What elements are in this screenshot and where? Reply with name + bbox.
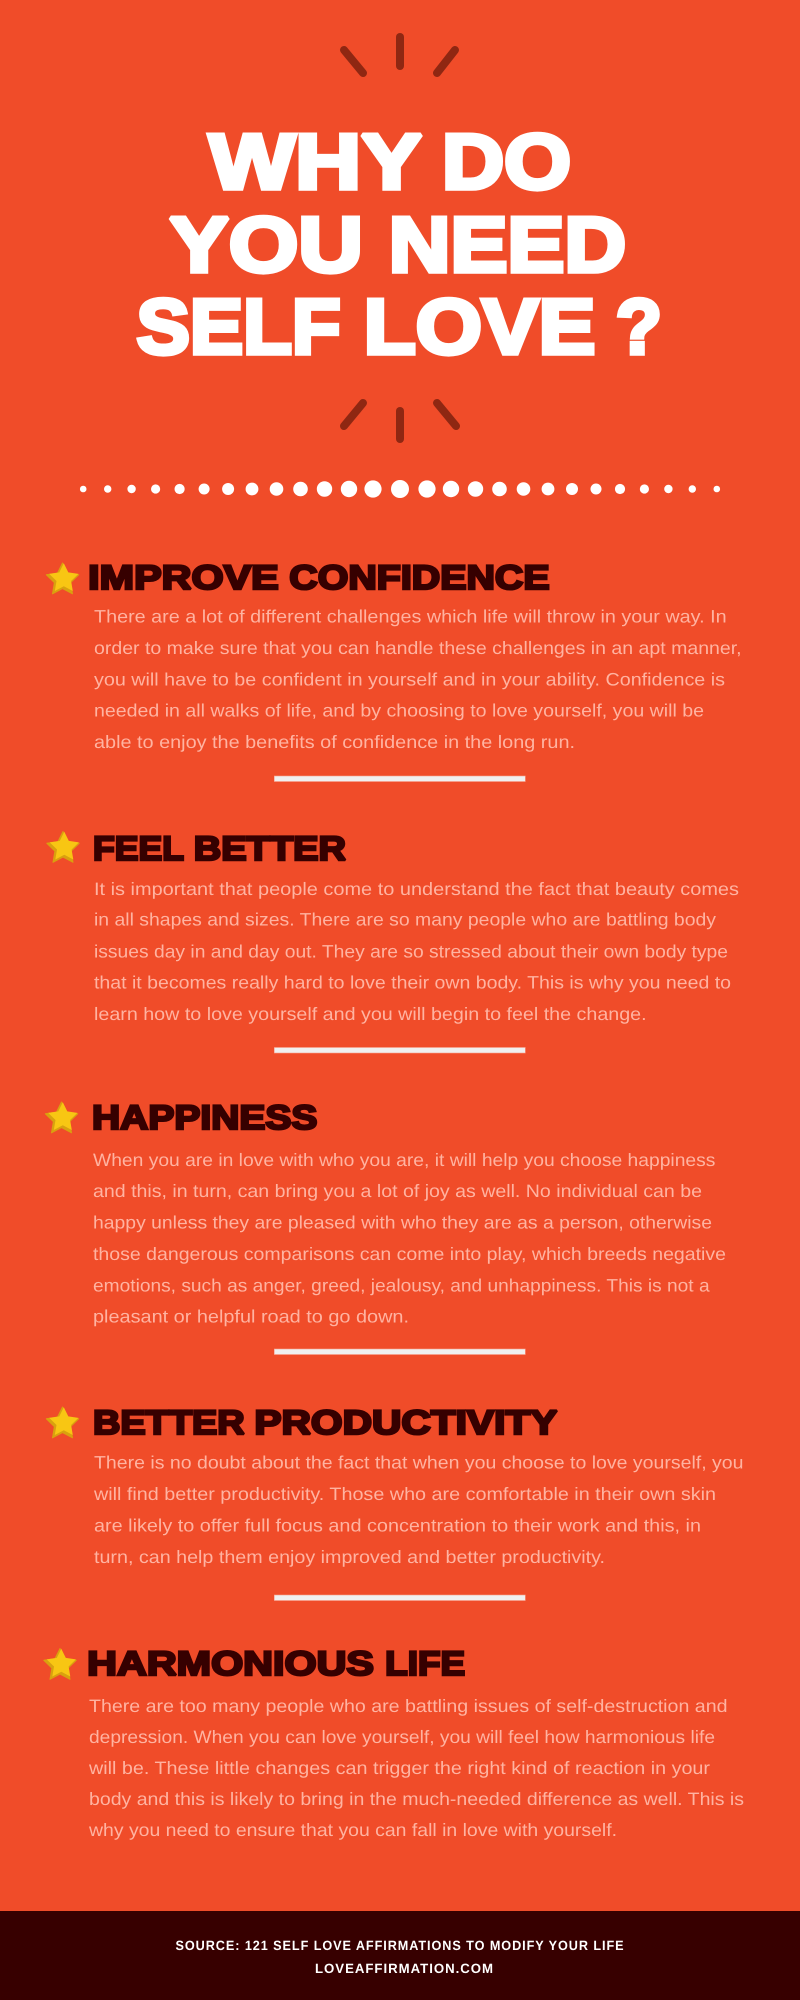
dotted separator	[80, 480, 720, 498]
title: WHY	[209, 118, 422, 206]
panel: happiness	[45, 1099, 726, 1327]
footer	[0, 1911, 800, 2000]
text block: pleasant or helpful road to go down.	[93, 1307, 409, 1327]
text block	[94, 607, 742, 752]
text block	[93, 1150, 726, 1327]
text block: will be. These little changes can trigger the right kind of reaction in your	[88, 1758, 710, 1778]
text block	[93, 1453, 744, 1567]
title: YOU	[169, 201, 363, 289]
icon: star	[45, 1102, 78, 1133]
text block: There is no doubt about the fact that when you choose to love yourself, you	[94, 1453, 744, 1473]
text block: issues day in and day out. They are so stressed about their own body type	[94, 941, 728, 961]
heading: FEEL	[93, 830, 184, 868]
icon: star	[46, 563, 79, 594]
heading	[88, 559, 550, 597]
title: LOVE	[364, 283, 595, 371]
text block: will find better productivity. Those who are comfortable in their own skin	[93, 1484, 716, 1504]
heading: PRODUCTIVITY	[254, 1404, 558, 1442]
text block	[94, 879, 739, 1024]
source text: LOVEAFFIRMATION.COM	[315, 1961, 494, 1976]
title: DO	[442, 118, 571, 206]
heading: CONFIDENCE	[289, 559, 550, 597]
panel: feel better	[47, 830, 739, 1024]
text block: learn how to love yourself and you will begin to feel the change.	[94, 1004, 647, 1024]
icon: star	[46, 1407, 79, 1438]
heading: BETTER	[194, 830, 346, 868]
source text	[176, 1938, 624, 1976]
heading: LIFE	[385, 1645, 465, 1683]
heading: HAPPINESS	[92, 1099, 317, 1137]
text block	[88, 1696, 744, 1840]
panel: harmonious life	[44, 1645, 744, 1840]
title: NEED	[389, 201, 626, 289]
heading	[93, 830, 346, 868]
panel: improve confidence	[46, 559, 742, 752]
text block: body and this is likely to bring in the much-needed difference as well. This is	[89, 1789, 744, 1809]
text block: why you need to ensure that you can fall in love with yourself.	[88, 1820, 617, 1840]
text block: There are a lot of different challenges which life will throw in your way. In	[94, 607, 727, 627]
icon: star	[47, 832, 79, 862]
text block: in all shapes and sizes. There are so many people who are battling body	[94, 910, 716, 930]
icon: bottom burst rays	[344, 403, 456, 439]
text block: It is important that people come to understand the fact that beauty comes	[94, 879, 739, 899]
text block: are likely to offer full focus and concentration to their work and this, in	[94, 1516, 701, 1536]
icon: top burst rays	[344, 37, 455, 73]
text block: order to make sure that you can handle these challenges in an apt manner,	[94, 638, 742, 658]
text block: needed in all walks of life, and by choosing to love yourself, you will be	[94, 701, 704, 721]
title	[137, 118, 662, 371]
source text: SOURCE: 121 SELF LOVE AFFIRMATIONS TO MODIFY YOUR LIFE	[176, 1938, 624, 1953]
heading: BETTER	[93, 1404, 245, 1442]
title: SELF	[137, 283, 341, 371]
text block: those dangerous comparisons can come into play, which breeds negative	[93, 1244, 726, 1264]
text block: There are too many people who are battling issues of self-destruction and	[89, 1696, 728, 1716]
heading: IMPROVE	[88, 559, 279, 597]
text block: emotions, such as anger, greed, jealousy, and unhappiness. This is not a	[93, 1276, 711, 1296]
text block: and this, in turn, can bring you a lot of joy as well. No individual can be	[93, 1181, 702, 1201]
title: ?	[616, 283, 662, 371]
heading: HARMONIOUS	[87, 1645, 374, 1683]
text block: turn, can help them enjoy improved and better productivity.	[94, 1547, 605, 1567]
panel: better productivity	[46, 1404, 744, 1567]
text block: you will have to be confident in yourself and in your ability. Confidence is	[94, 669, 725, 689]
text block: When you are in love with who you are, it will help you choose happiness	[93, 1150, 715, 1170]
icon: star	[44, 1648, 76, 1679]
text block: that it becomes really hard to love their own body. This is why you need to	[94, 973, 731, 993]
heading	[87, 1645, 465, 1683]
text block: happy unless they are pleased with who they are as a person, otherwise	[93, 1213, 712, 1233]
heading	[93, 1404, 558, 1442]
text block: able to enjoy the benefits of confidence in the long run.	[94, 732, 575, 752]
text block: depression. When you can love yourself, you will feel how harmonious life	[89, 1727, 715, 1747]
